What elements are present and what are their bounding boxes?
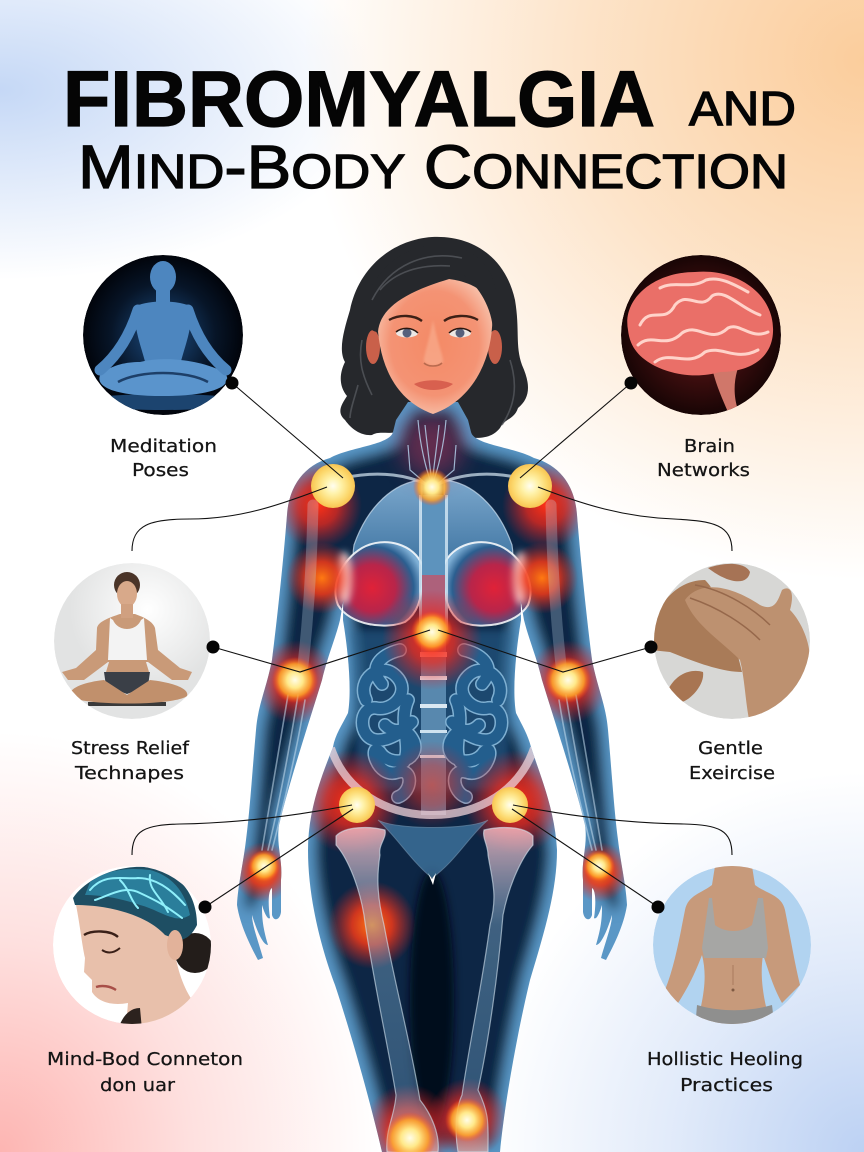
dot bbox=[226, 376, 238, 390]
pelvic band bbox=[331, 748, 534, 815]
arm bones bbox=[262, 505, 602, 850]
panel: mind-body connection bbox=[47, 866, 243, 1096]
hair front bbox=[350, 245, 514, 425]
label: Mind-Bod Conneton bbox=[47, 1049, 243, 1070]
spine column bbox=[419, 495, 448, 815]
dot bbox=[624, 376, 638, 390]
icon: meditating figure bbox=[78, 255, 248, 415]
icon: brain bbox=[621, 255, 781, 415]
title bbox=[63, 54, 796, 201]
icon: hands bbox=[650, 563, 810, 725]
label: Stress Relief bbox=[71, 738, 190, 759]
label bbox=[657, 436, 750, 481]
face and ears bbox=[366, 278, 502, 414]
label bbox=[47, 1049, 243, 1096]
dot bbox=[198, 900, 212, 914]
label bbox=[110, 436, 217, 481]
collarbones bbox=[352, 472, 512, 484]
breast outer highlights bbox=[337, 552, 528, 604]
dark inner legs bbox=[410, 870, 454, 1130]
label bbox=[689, 738, 775, 784]
title: MIND-BODY CONNECTION bbox=[78, 133, 788, 201]
panel: meditation poses bbox=[78, 255, 248, 481]
leg bones bbox=[336, 828, 533, 1152]
breasts bbox=[335, 542, 531, 626]
panel: holistic healing bbox=[647, 866, 811, 1096]
dot bbox=[644, 640, 658, 654]
label: Gentle bbox=[698, 738, 763, 759]
connector lines bbox=[132, 383, 732, 907]
hair back bbox=[340, 237, 528, 438]
title: FIBROMYALGIA bbox=[63, 54, 655, 143]
label: don uar bbox=[100, 1075, 176, 1096]
eyes, brows, nose, lips bbox=[389, 316, 478, 390]
panel: gentle exercise bbox=[644, 563, 810, 784]
label: Hollistic Heoling bbox=[647, 1049, 803, 1070]
label: Practices bbox=[680, 1075, 773, 1096]
red pain glow bbox=[233, 413, 630, 1152]
panel: stress relief bbox=[54, 563, 220, 784]
neck nerves bbox=[408, 420, 456, 487]
internal anatomy bbox=[233, 413, 630, 1152]
intestines bbox=[362, 650, 502, 797]
pelvic funnel bbox=[378, 820, 488, 878]
label: Brain bbox=[684, 436, 735, 457]
dot bbox=[206, 640, 220, 654]
body silhouette bbox=[237, 402, 627, 1152]
label: Meditation bbox=[110, 436, 217, 457]
yellow pain points bbox=[248, 464, 615, 1152]
label: Technapes bbox=[74, 763, 184, 784]
icon: yoga woman bbox=[54, 563, 210, 719]
panel: brain networks bbox=[621, 255, 781, 481]
lungs bbox=[352, 480, 514, 562]
title: AND bbox=[689, 83, 796, 136]
label: Exeircise bbox=[689, 763, 775, 784]
icon: woman with glowing brain bbox=[53, 866, 215, 1030]
white gap between legs bbox=[428, 873, 436, 885]
label bbox=[71, 738, 190, 784]
icon: torso bbox=[653, 866, 811, 1030]
lower torso tint bbox=[352, 630, 512, 790]
label: Networks bbox=[657, 460, 750, 481]
label bbox=[647, 1049, 803, 1096]
human figure bbox=[233, 237, 630, 1152]
dot bbox=[652, 900, 664, 914]
label: Poses bbox=[132, 460, 189, 481]
